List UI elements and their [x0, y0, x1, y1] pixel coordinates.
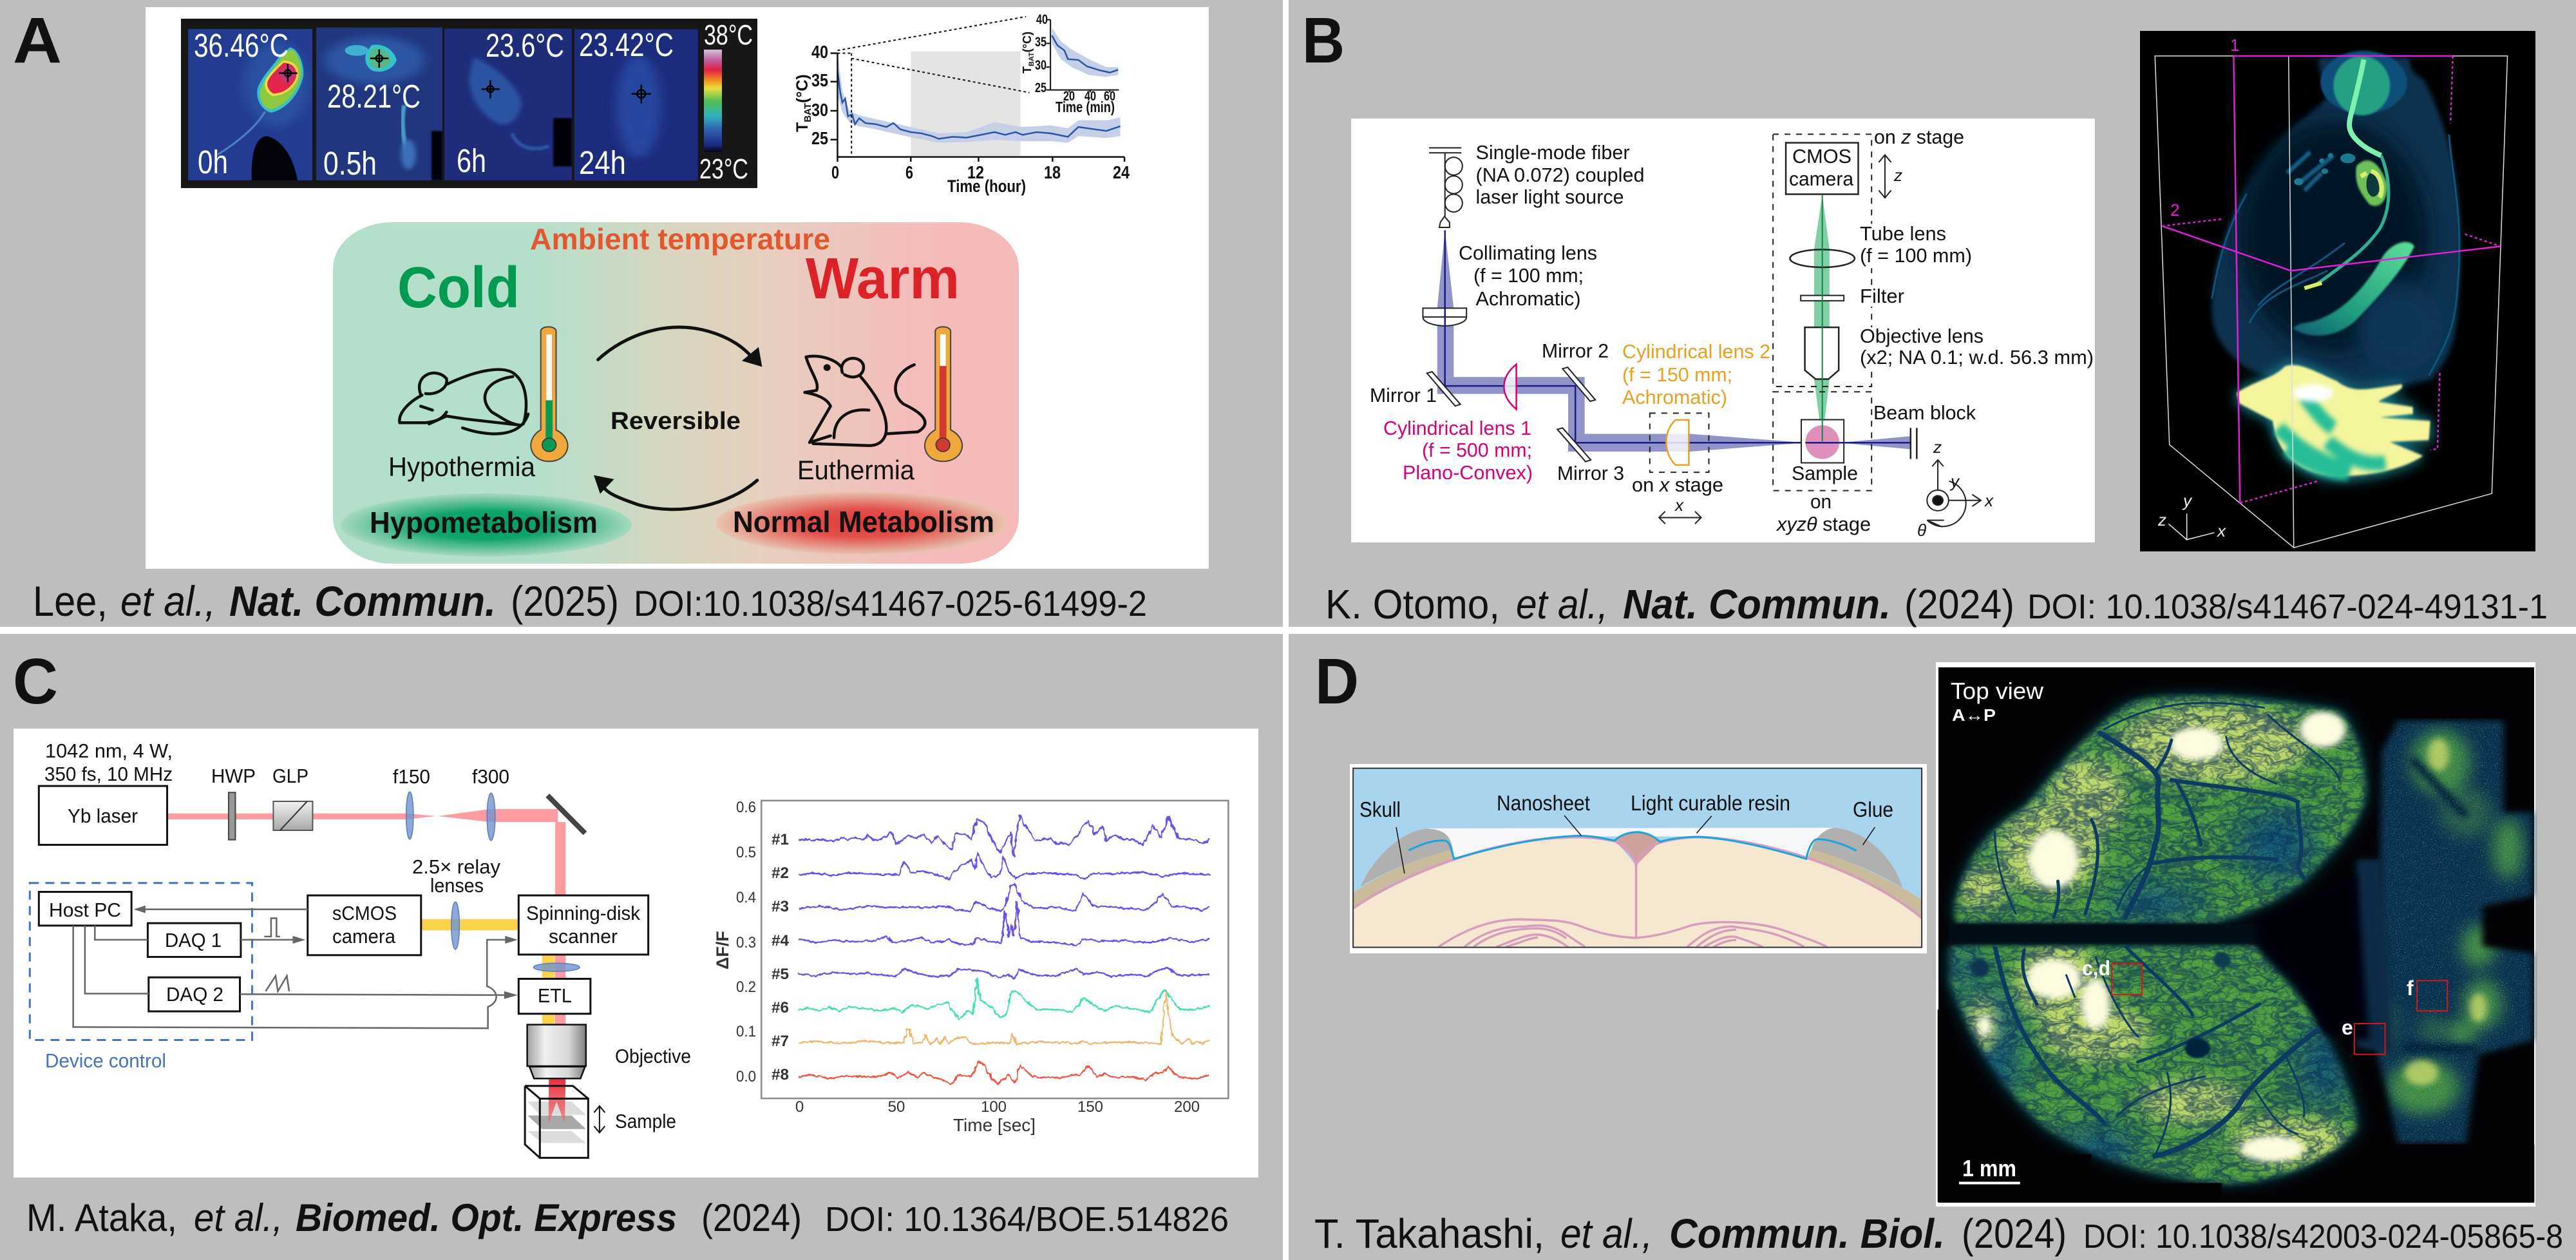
label: euthermia: Euthermia [797, 455, 915, 485]
chart axis labels: Time [sec] [953, 1115, 1036, 1135]
schematic labels: Light curable resin [1631, 791, 1790, 815]
body volume [2211, 57, 2461, 387]
schematic labels: f300 [472, 765, 509, 788]
optical labels: on x stage [1632, 473, 1723, 496]
schematic labels: 350 fs, 10 MHz [44, 763, 173, 785]
crosshair [370, 50, 388, 68]
label: normal metabolism: Normal Metabolism [733, 505, 994, 539]
tube lens, filter, objective [1790, 249, 1855, 267]
green intestinal ribbon [2293, 242, 2414, 336]
volume labels: y [2182, 491, 2193, 510]
brain [1353, 836, 1922, 948]
trace 7 [799, 993, 1209, 1044]
bounding box [2155, 56, 2508, 548]
chart tick labels: T [1021, 66, 1034, 73]
saturated white patches [1978, 711, 2346, 1161]
chart tick labels: 40 [811, 42, 828, 62]
volume labels: 1 [2230, 35, 2239, 55]
chart axis labels: 0.2 [736, 978, 756, 996]
air background [1353, 768, 1922, 948]
vessel pools [2185, 1038, 2210, 1058]
schematic labels: Device control [45, 1049, 166, 1072]
caption A: et al., [120, 577, 216, 625]
detection beam [1814, 195, 1830, 327]
arrow: cold to warm [598, 327, 762, 367]
arrow: warm to cold [594, 475, 757, 510]
lenses [406, 792, 580, 971]
chart axis labels: 0 [795, 1098, 804, 1116]
trace 6 [799, 979, 1209, 1020]
device control boundary [30, 883, 252, 1040]
optical labels: Cylindrical lens 1 [1383, 417, 1531, 439]
thermal labels: 23°C [699, 153, 748, 185]
optical labels: Plano-Convex) [1403, 461, 1533, 484]
cylindrical lens 2 [1666, 420, 1689, 465]
optical labels: xyzθ stage [1776, 513, 1871, 535]
caption D [1314, 1210, 2563, 1257]
optical labels: (f = 500 mm; [1422, 439, 1532, 461]
schematic labels: HWP [211, 765, 256, 787]
micrograph labels: e [2342, 1016, 2353, 1039]
volume labels: 2 [2170, 200, 2179, 220]
chart tick labels: 12 [967, 162, 984, 182]
region boxes [2112, 964, 2447, 1055]
thermal image strip [181, 19, 757, 188]
ambient temperature diagram [333, 222, 1019, 564]
caption D: (2024) [1962, 1210, 2067, 1257]
schematic labels: Nanosheet [1497, 791, 1590, 815]
volume labels: x [2216, 521, 2226, 540]
panel A [13, 5, 1209, 625]
optical labels: Objective lens [1860, 325, 1984, 347]
chart axis labels: #4 [772, 932, 790, 950]
chart axis labels: 0.4 [736, 889, 756, 906]
chart tick labels: 30 [1035, 58, 1046, 73]
schematic labels: Sample [615, 1110, 676, 1132]
leader lines [1396, 816, 1875, 873]
polariser cube [273, 801, 312, 830]
thermal labels [194, 19, 753, 185]
midline sinus [1949, 924, 2264, 943]
steering mirror [547, 796, 585, 834]
schematic labels: Host PC [49, 899, 121, 921]
schematic labels: lenses [430, 874, 484, 897]
optical labels: on z stage [1874, 126, 1964, 148]
schematic labels: scanner [549, 925, 618, 948]
label: hypothermia: Hypothermia [388, 452, 536, 482]
chart axis labels: 0.0 [736, 1068, 756, 1085]
schematic labels: ETL [538, 984, 572, 1007]
schematic labels: Yb laser [68, 805, 138, 827]
fluorescence beam [421, 919, 554, 1025]
caption B: Nat. Commun. [1623, 581, 1891, 627]
panel: light-sheet optical schematic [1351, 119, 2095, 542]
bright mass [2235, 363, 2432, 479]
panel D [1314, 645, 2563, 1257]
nanosheet [1408, 832, 1857, 859]
heading: ambient temperature: Ambient temperature [530, 222, 830, 256]
chart tick labels: BAT [1028, 52, 1036, 66]
trace 3 [799, 884, 1209, 911]
schematic labels: 1042 nm, 4 W, [45, 740, 173, 762]
thermal labels: 28.21°C [327, 78, 421, 115]
thermal labels: 6h [457, 142, 486, 179]
optical layout [1423, 134, 1981, 527]
metabolism ellipse: normal metabolism [716, 492, 1007, 555]
trace 5 [799, 968, 1209, 979]
chart tick labels: 25 [1035, 81, 1046, 95]
chart tick labels: 40 [1036, 12, 1048, 27]
laser beam [168, 809, 565, 1025]
micrograph labels: f [2407, 977, 2414, 1000]
optical labels: x [1984, 491, 1994, 510]
chart tick labels: BAT [802, 103, 813, 122]
thermal labels: 23.42°C [579, 26, 674, 63]
hemispheres [1944, 693, 2373, 1188]
caption B: et al., [1516, 581, 1608, 627]
sample cuvette and focal planes [525, 1080, 588, 1158]
excitation beam [1437, 231, 1805, 452]
panel B [1302, 5, 2548, 627]
chart axis labels: 200 [1174, 1098, 1200, 1116]
skull left and right [1353, 849, 1455, 910]
optical labels: Sample [1792, 462, 1858, 484]
caption C: DOI: 10.1364/BOE.514826 [825, 1200, 1229, 1239]
optical labels: Filter [1860, 285, 1904, 307]
optical labels: (NA 0.072) coupled [1476, 164, 1645, 186]
label: reversible: Reversible [611, 408, 741, 435]
chart axis labels: #6 [772, 999, 789, 1017]
trace 1 [799, 815, 1209, 857]
blood vessels [1995, 703, 2340, 1156]
optical labels: Mirror 2 [1542, 339, 1609, 362]
chart axis labels: 50 [888, 1098, 905, 1116]
fibre source [1429, 148, 1461, 216]
instrument boxes [39, 786, 649, 1014]
schematic labels: camera [332, 925, 396, 948]
panel C white card [14, 729, 1258, 1178]
icon: cold thermometer [531, 327, 568, 461]
icon: upright mouse [805, 356, 925, 446]
chart axis labels: #5 [772, 966, 789, 983]
masked corners [1938, 1009, 2222, 1202]
chart tick labels: 18 [1044, 162, 1061, 182]
thermal frame 24h [574, 29, 698, 180]
optical labels: Single-mode fiber [1476, 141, 1629, 164]
schematic labels: Objective [615, 1045, 691, 1067]
schematic labels: sCMOS [332, 902, 397, 924]
micrograph labels: A↔P [1952, 705, 1996, 725]
scan arrow [594, 1106, 605, 1132]
caption B [1325, 581, 2548, 627]
trace 2 [799, 853, 1209, 879]
micrograph labels: Top view [1951, 678, 2044, 704]
heading: cold: Cold [397, 256, 520, 320]
caption D: et al., [1560, 1210, 1653, 1257]
panel C [13, 645, 1258, 1239]
volume labels [2157, 35, 2239, 540]
illustration: thermometers, mice and arrows [399, 327, 962, 510]
thermal frame 0h [188, 29, 312, 180]
optical labels: Achromatic) [1622, 386, 1727, 408]
panel A white card [146, 7, 1209, 569]
bright patches [1957, 704, 2348, 1167]
chart axis labels: 0.5 [736, 844, 756, 861]
stages [1650, 134, 1871, 491]
optical labels: CMOS [1792, 145, 1852, 167]
thermal frame 0.5h [316, 28, 442, 180]
objective lens [527, 1025, 586, 1078]
optical labels: Achromatic) [1476, 287, 1580, 310]
schematic labels: DAQ 2 [166, 983, 223, 1006]
frame [1353, 768, 1922, 948]
panel label A: A [13, 5, 62, 77]
caption A: Lee, [33, 577, 108, 625]
schematic labels [1359, 791, 1893, 821]
glue left and right [1360, 829, 1453, 887]
schematic labels: 2.5× relay [412, 855, 500, 878]
signal wires [73, 906, 518, 1028]
caption A [33, 577, 1147, 625]
caption B: (2024) [1904, 581, 2014, 627]
caption D: Commun. Biol. [1669, 1210, 1945, 1257]
temperature colour bar [704, 50, 722, 152]
two-photon microscope schematic [30, 740, 691, 1158]
optical labels: z [1893, 166, 1902, 185]
caption C: (2024) [701, 1196, 802, 1239]
chart axis labels: 0.6 [736, 799, 756, 816]
light curable resin [1615, 832, 1660, 863]
thermal frames [188, 28, 572, 180]
chart axis labels: #1 [772, 831, 789, 848]
collimating lens [1423, 308, 1466, 326]
window cavity [1428, 828, 1835, 861]
meninges and internal lines [1353, 837, 1922, 947]
chart axis labels: 0.1 [736, 1023, 756, 1040]
camera [1786, 143, 1858, 195]
icon: warm thermometer [925, 327, 962, 461]
schematic labels: f150 [393, 765, 430, 788]
panel: cranial window schematic [1350, 764, 1927, 953]
chart tick labels: (°C) [793, 74, 811, 103]
caption D: T. Takahashi, [1314, 1210, 1544, 1257]
panel: brain top view micrograph [1936, 662, 2537, 1207]
optical labels: Cylindrical lens 2 [1622, 340, 1770, 363]
optical labels: (f = 100 mm) [1860, 244, 1972, 267]
trace 8 [799, 1062, 1209, 1084]
scale bar [1959, 1182, 2020, 1185]
chart tick labels: 40 [1084, 89, 1096, 104]
chart axis labels: 100 [981, 1098, 1007, 1116]
panel label C: C [13, 645, 58, 718]
thermal labels: 36.46°C [194, 27, 289, 64]
half wave plate [229, 792, 235, 840]
chart axis labels: 0.3 [736, 934, 756, 951]
optical labels: camera [1789, 167, 1854, 190]
optical labels: (f = 150 mm; [1622, 363, 1732, 386]
chart tick labels: 6 [905, 162, 913, 182]
chart axis labels [713, 799, 1200, 1135]
optical labels: Mirror 1 [1370, 384, 1437, 406]
schematic labels: Skull [1359, 797, 1401, 821]
chart axis labels: ΔF/F [713, 931, 732, 969]
schematic labels [44, 740, 691, 1132]
gradient background card [333, 222, 1019, 564]
optical labels: Tube lens [1860, 222, 1946, 245]
chart axis labels: #7 [772, 1033, 789, 1050]
schematic labels: DAQ 1 [165, 929, 222, 951]
fine capillary network [1944, 693, 2373, 1188]
slice planes [2162, 56, 2501, 503]
caption B: K. Otomo, [1325, 581, 1500, 627]
chart tick labels: 0 [831, 162, 839, 182]
panel label B: B [1302, 5, 1345, 77]
panel label D: D [1315, 645, 1359, 718]
hemisphere glow [1955, 696, 2365, 922]
caption C: M. Ataka, [26, 1196, 177, 1239]
thermal labels: 38°C [704, 19, 753, 51]
optical labels: Collimating lens [1459, 242, 1597, 264]
optical labels: z [1933, 437, 1942, 457]
chart tick labels: 20 [1063, 89, 1075, 104]
schematic labels: Spinning-disk [526, 902, 640, 924]
caption A: Nat. Commun. [229, 577, 496, 625]
optical labels: θ [1917, 520, 1926, 540]
label knockouts over stage line [1864, 224, 1877, 368]
thermal labels: 0h [198, 144, 228, 180]
chart: BAT temperature over time [793, 12, 1130, 196]
caption A: (2025) [511, 577, 619, 625]
chart axis labels: #8 [772, 1066, 789, 1083]
optical labels: laser light source [1476, 186, 1624, 208]
thermal labels: 24h [579, 144, 626, 181]
schematic labels: Glue [1853, 797, 1893, 821]
chart: fluorescence traces [713, 799, 1228, 1135]
optical labels: (x2; NA 0.1; w.d. 56.3 mm) [1860, 346, 2094, 368]
chart tick labels: 30 [811, 100, 828, 120]
caption C: et al., [194, 1196, 283, 1239]
volume labels: z [2157, 510, 2166, 530]
chart tick labels: (°C) [1021, 32, 1034, 52]
chart axis labels: #3 [772, 898, 789, 915]
chart tick labels: 60 [1104, 89, 1115, 104]
optical labels: on [1810, 490, 1832, 513]
chart axis labels: #2 [772, 864, 789, 882]
thermal labels: 0.5h [323, 145, 377, 182]
optical labels: Mirror 3 [1557, 462, 1624, 484]
cylindrical lens 1 [1504, 365, 1517, 409]
chart tick labels [793, 12, 1130, 196]
metabolism ellipse: hypometabolism [341, 493, 632, 557]
stage arrows [1659, 155, 1891, 524]
beam block [1911, 428, 1917, 459]
axis gizmo [2168, 513, 2214, 540]
optical labels: y [1949, 472, 1960, 491]
chart tick labels: 24 [1113, 162, 1130, 182]
sample [1801, 419, 1844, 463]
chart tick labels: Time (min) [1056, 99, 1115, 115]
mirrors [1427, 367, 1595, 462]
chart tick labels: 35 [811, 70, 828, 90]
optical labels: Beam block [1873, 401, 1976, 424]
icon: sleeping mouse [399, 370, 528, 434]
faint outlines and small organs [2287, 152, 2333, 191]
speckle [1944, 693, 2373, 1188]
crosshair [279, 64, 298, 82]
optical labels: x [1674, 495, 1684, 515]
micrograph labels [1951, 678, 2414, 1181]
micrograph labels: 1 mm [1962, 1155, 2016, 1181]
cerebellum region [2373, 718, 2537, 1149]
medial cerebellar haze [2356, 859, 2394, 1055]
axis gizmo [1927, 460, 1981, 527]
heading: warm: Warm [806, 247, 960, 311]
panel: 3D fluorescence volume [2140, 31, 2535, 551]
chart axis labels: 150 [1077, 1098, 1103, 1116]
thermal labels: 23.6°C [486, 27, 564, 64]
chart tick labels: 25 [811, 128, 828, 148]
chart tick labels: Time (hour) [947, 177, 1026, 196]
caption C [26, 1196, 1229, 1239]
chart tick labels: T [793, 122, 811, 132]
chart tick labels: 35 [1035, 35, 1046, 50]
caption A: DOI:10.1038/s41467-025-61499-2 [634, 583, 1147, 624]
optical labels [1370, 126, 2094, 540]
optical labels: (f = 100 mm; [1473, 264, 1584, 287]
trace 4 [799, 902, 1209, 946]
schematic labels: GLP [272, 765, 308, 787]
thermal frame 6h [444, 28, 572, 180]
caption C: Biomed. Opt. Express [296, 1196, 677, 1239]
caption B: DOI: 10.1038/s41467-024-49131-1 [2027, 587, 2548, 626]
darker falloff [1944, 809, 2348, 1170]
micrograph labels: c,d [2082, 957, 2110, 980]
gut tube [2316, 155, 2389, 285]
label: hypometabolism: Hypometabolism [370, 506, 598, 539]
head [2320, 51, 2407, 113]
crosshair [482, 80, 500, 99]
